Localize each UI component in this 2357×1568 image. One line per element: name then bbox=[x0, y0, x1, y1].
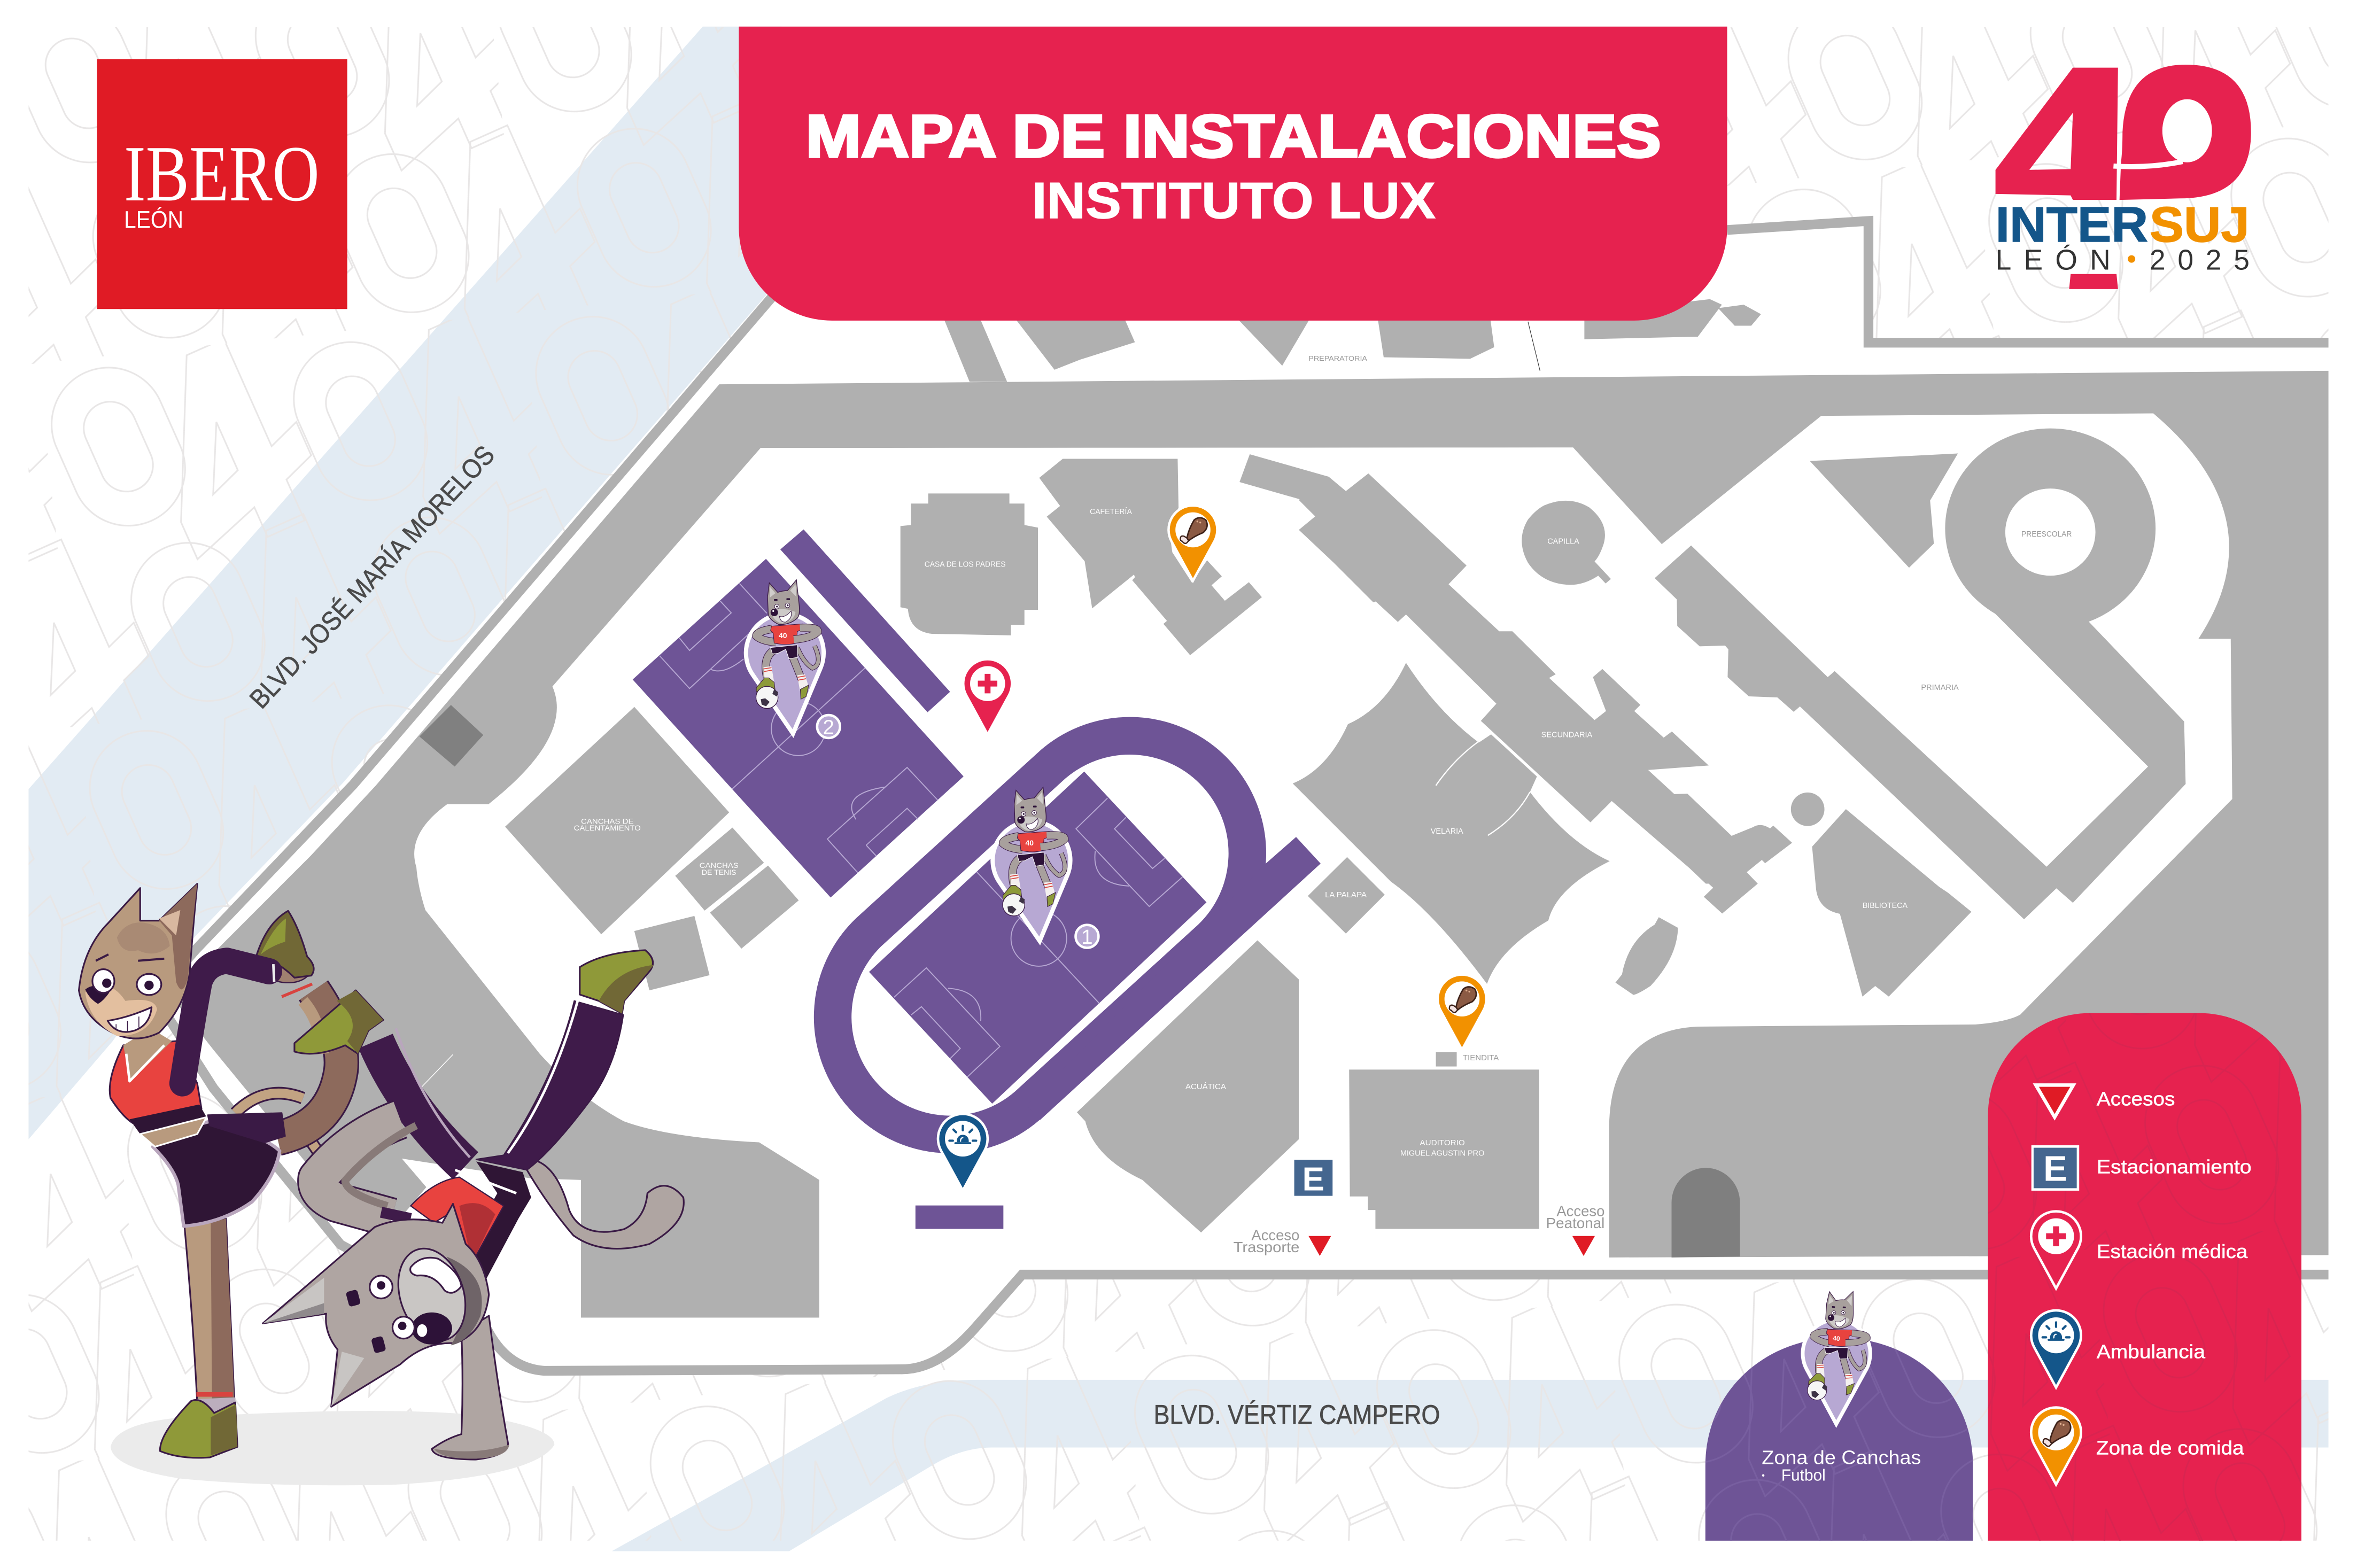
logo: Ibero León: LEÓN bbox=[124, 206, 183, 234]
logo: Ibero León bbox=[97, 59, 347, 309]
legend text: accesos: Accesos bbox=[2097, 1088, 2175, 1109]
pin: medical station bbox=[963, 659, 1012, 734]
bent arm bbox=[317, 1119, 400, 1218]
pin: wolf field 1 bbox=[989, 787, 1079, 945]
label: primaria: PRIMARIA bbox=[1921, 683, 1959, 692]
field number 1 bbox=[1076, 925, 1098, 949]
label: tiendita: TIENDITA bbox=[1463, 1053, 1499, 1062]
building: biblioteca bbox=[1812, 809, 1972, 997]
building: cafetería bbox=[1039, 459, 1262, 655]
warm-up and tennis courts bbox=[505, 707, 798, 990]
label: preparatoria: PREPARATORIA bbox=[1308, 354, 1367, 362]
strip by field 2 bbox=[780, 530, 950, 712]
label: preescolar: PREESCOLAR bbox=[2021, 530, 2072, 539]
building: triangle wing bbox=[1810, 454, 1958, 568]
pin: food tiendita bbox=[1438, 975, 1486, 1050]
road: Blvd. José María Morelos bbox=[28, 27, 781, 1139]
label: auditorio: AUDITORIO bbox=[1420, 1138, 1465, 1147]
access: transporte bbox=[1234, 1227, 1331, 1256]
standing arm bbox=[432, 1316, 508, 1460]
label: de tenis: DE TENIS bbox=[702, 868, 736, 876]
legend text: ambulancia: Ambulancia bbox=[2097, 1340, 2206, 1362]
head bbox=[79, 884, 197, 1038]
preparatoria buildings bbox=[940, 299, 1761, 382]
logo: 40 Intersuj León 2025: INTER bbox=[1996, 197, 2148, 252]
road thin line bbox=[417, 1054, 453, 1092]
mascots bbox=[79, 884, 684, 1485]
label: calentamiento: CALENTAMIENTO bbox=[574, 824, 641, 832]
legend text: zona de comida: Zona de comida bbox=[2096, 1437, 2244, 1459]
label: la palapa: LA PALAPA bbox=[1325, 890, 1367, 899]
access: peatonal: Acceso bbox=[1556, 1202, 1604, 1219]
parking marker bbox=[1294, 1160, 1332, 1198]
label: acuática: ACUÁTICA bbox=[1185, 1082, 1227, 1091]
zona item: Futbol bbox=[1781, 1465, 1826, 1484]
road: Blvd. Vértiz Campero bbox=[612, 1380, 2329, 1551]
logo: 40 Intersuj León 2025: SUJ bbox=[2150, 197, 2250, 252]
road label: Blvd. José María Morelos: BLVD. JOSÉ MARÍA MORELOS bbox=[244, 439, 500, 714]
dark diamond bbox=[420, 705, 483, 766]
skirt bbox=[153, 1121, 280, 1226]
field number 2 bbox=[817, 715, 840, 739]
panel: legend bbox=[1988, 1013, 2301, 1541]
zona heading: Zona de Canchas bbox=[1762, 1446, 1921, 1468]
label: canchas: CANCHAS bbox=[700, 861, 739, 870]
logo: 40 Intersuj León 2025 bbox=[1996, 65, 2251, 289]
road label: Blvd. Vértiz Campero: BLVD. VÉRTIZ CAMPERO bbox=[1154, 1399, 1440, 1430]
building labels bbox=[574, 507, 1908, 1158]
standing leg bbox=[184, 1218, 235, 1402]
legend icon: estación médica bbox=[2031, 1212, 2081, 1288]
legend text: estación médica: Estación médica bbox=[2097, 1240, 2248, 1262]
access: peatonal bbox=[1546, 1202, 1604, 1256]
building: peanut pavilion bbox=[1615, 917, 1678, 995]
pin: wolf field 2 bbox=[742, 580, 832, 738]
bullet bbox=[1762, 1474, 1764, 1477]
campus ground bbox=[155, 150, 2329, 1371]
wolf pin zona de canchas bbox=[1792, 1286, 1883, 1431]
label: canchas de calentamiento: CANCHAS DE bbox=[581, 817, 633, 825]
pool bbox=[1791, 793, 1825, 826]
logo: Ibero León: IBERO bbox=[124, 130, 320, 218]
subtitle: INSTITUTO LUX bbox=[1032, 172, 1436, 229]
velaria arcs bbox=[1436, 741, 1530, 835]
legend icon: zona de comida bbox=[2031, 1408, 2081, 1485]
legend icon: ambulancia bbox=[2031, 1310, 2081, 1387]
building: auditorio bbox=[1349, 1069, 1539, 1229]
building: casa de los padres bbox=[901, 493, 1038, 635]
building: preescolar ring bbox=[1945, 429, 2156, 628]
mascot shadow bbox=[111, 1411, 554, 1485]
pin: ambulance bbox=[938, 1114, 988, 1191]
parking marker: E bbox=[1302, 1161, 1324, 1198]
tunnel bbox=[1672, 1168, 1740, 1257]
shoulder and raised arm bbox=[182, 961, 269, 1083]
building: acuática bbox=[1077, 941, 1299, 1232]
field number 2: 2 bbox=[823, 716, 834, 739]
label: casa de los padres: CASA DE LOS PADRES bbox=[925, 560, 1006, 569]
title heading: MAPA DE INSTALACIONES bbox=[806, 102, 1661, 169]
perimeter wall bbox=[155, 221, 2329, 1371]
field number 1: 1 bbox=[1081, 926, 1093, 949]
purple parking bar bbox=[916, 1206, 1003, 1229]
building: primaria bbox=[1655, 546, 2185, 919]
top bbox=[110, 1041, 201, 1125]
building: velaria bbox=[1293, 663, 1610, 984]
field 2 bbox=[633, 559, 964, 897]
mascot: grey wolf bbox=[263, 950, 684, 1460]
head bbox=[263, 1204, 489, 1407]
legend icon: accesos bbox=[2033, 1083, 2076, 1121]
label: miguel agustin pro: MIGUEL AGUSTIN PRO bbox=[1400, 1148, 1485, 1158]
logo: 40 Intersuj León 2025: 2025 bbox=[2150, 244, 2250, 276]
legend icon: estacionamiento bbox=[2032, 1145, 2079, 1191]
building: capilla bbox=[1522, 501, 1611, 585]
label: cafetería: CAFETERÍA bbox=[1090, 507, 1133, 516]
label: capilla: CAPILLA bbox=[1547, 537, 1580, 546]
pin: food cafetería bbox=[1168, 506, 1218, 581]
label: secundaria: SECUNDARIA bbox=[1541, 731, 1593, 740]
grey campus roads bbox=[177, 371, 2329, 1317]
mascot: tan dog bbox=[79, 884, 342, 1458]
label: velaria: VELARIA bbox=[1431, 827, 1464, 836]
legend icon: estacionamiento: E bbox=[2043, 1149, 2067, 1189]
logo: 40 Intersuj León 2025: LEÓN bbox=[1996, 244, 2111, 276]
building: la palapa bbox=[1308, 857, 1385, 934]
athletics track bbox=[833, 736, 1247, 1135]
legend text: estacionamiento: Estacionamiento bbox=[2097, 1156, 2252, 1178]
access: transporte: Acceso bbox=[1251, 1227, 1299, 1243]
building: tiendita bbox=[1436, 1052, 1457, 1067]
access: transporte: Trasporte bbox=[1234, 1239, 1299, 1255]
field 1 bbox=[869, 772, 1206, 1104]
sports fields bbox=[633, 530, 1321, 1135]
building: secundaria bbox=[1239, 454, 1792, 913]
title banner bbox=[739, 27, 1727, 321]
divider line bbox=[1528, 322, 1540, 371]
label: biblioteca: BIBLIOTECA bbox=[1863, 901, 1908, 910]
campus buildings bbox=[1239, 454, 1825, 1067]
side strip of track bbox=[1027, 837, 1321, 1120]
panel: zona de canchas bbox=[1705, 1286, 1973, 1541]
access: peatonal: Peatonal bbox=[1546, 1215, 1604, 1231]
